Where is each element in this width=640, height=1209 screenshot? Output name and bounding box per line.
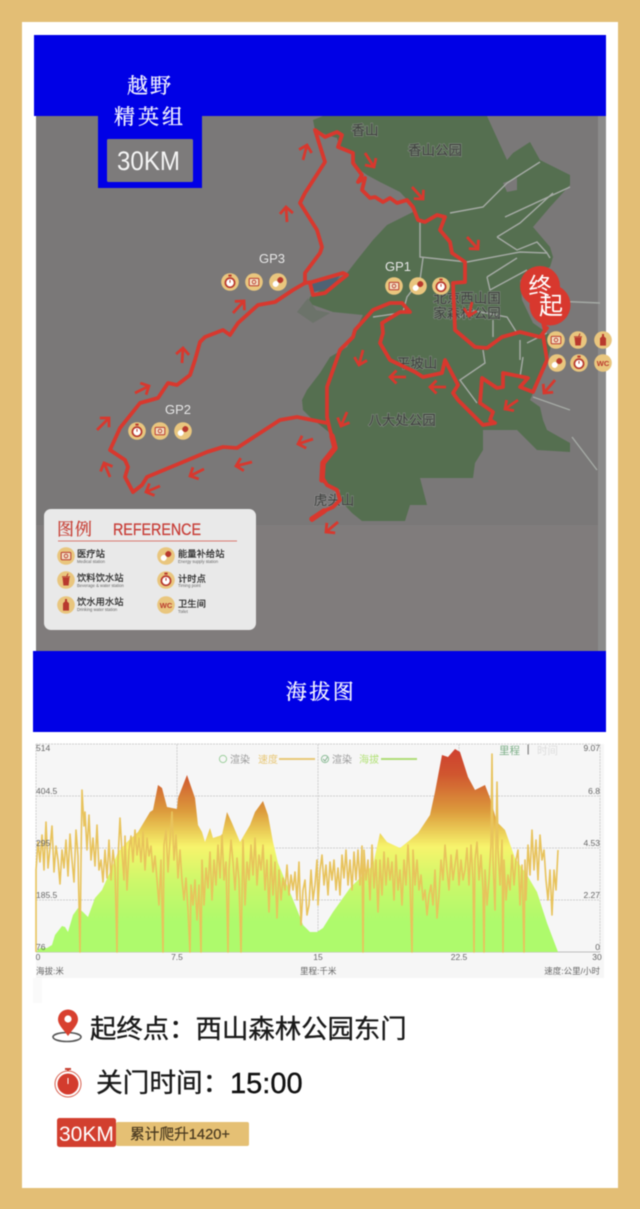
bottom axis: distance: 7.5 (171, 952, 183, 962)
map place labels: 平坡山 (397, 356, 437, 371)
distance and ascent tag: 累计爬升1420+ (130, 1126, 230, 1143)
elevation heading band (33, 651, 606, 732)
legend title: 图例 (57, 520, 93, 539)
title: group name (114, 74, 186, 129)
closing time row (55, 1068, 303, 1100)
panel: route map (36, 116, 612, 651)
legend item: toilet (157, 596, 206, 614)
start area service icons: WC (597, 359, 610, 368)
axis titles (36, 966, 600, 976)
chart legend: 海拔 (359, 753, 379, 766)
bottom axis: distance: 22.5 (451, 952, 468, 962)
closing time row: 关门时间： (96, 1068, 229, 1098)
checkpoint GP3 (221, 251, 287, 291)
legend item: toilet: Toilet (178, 609, 189, 614)
map place labels: 北京西山国 (433, 291, 501, 306)
left axis: elevation: 185.5 (36, 890, 58, 900)
legend item: beverage: 饮料饮水站 (77, 572, 124, 583)
map place labels: 家森林公园 (433, 305, 501, 321)
direction arrows (97, 145, 555, 532)
distance/time toggle: 里程 (499, 745, 520, 757)
start and finish markers (520, 266, 570, 331)
right axis: speed: 0 (595, 942, 600, 952)
legend item: toilet: 卫生间 (178, 598, 206, 609)
checkpoint GP1: GP1 (385, 259, 411, 274)
icon: stopwatch (55, 1068, 81, 1097)
legend item: drinking water: Drinking water station (77, 607, 118, 612)
icon: map pin (53, 1010, 81, 1042)
start and finish markers: 起 (539, 293, 563, 320)
speed line (36, 754, 558, 952)
legend item: energy: 能量补给站 (178, 548, 224, 559)
start area service icons (547, 331, 612, 372)
right axis: speed: 6.8 (588, 786, 600, 796)
axis titles: 里程:千米 (300, 966, 337, 976)
race route (110, 130, 547, 520)
distance/time toggle (499, 744, 558, 757)
chart legend: 渲染 (332, 753, 352, 766)
distance badge: 30KM (117, 146, 180, 176)
distance and ascent tag (57, 1118, 249, 1147)
legend item: drinking water: 饮水用水站 (77, 596, 124, 607)
bottom axis: distance: 15 (313, 952, 323, 962)
group title block (98, 74, 202, 188)
legend item: energy: Energy supply station (178, 559, 219, 564)
bottom axis: distance (36, 952, 602, 962)
map place labels: 虎头山 (314, 493, 354, 508)
start and finish markers: 终 (528, 273, 552, 299)
title: group name: 精英组 (114, 105, 186, 129)
legend item: timing: 计时点 (178, 573, 206, 584)
checkpoint GP3: GP3 (259, 251, 285, 266)
left axis: elevation: 76 (36, 942, 46, 952)
legend item: medical: 医疗站 (77, 548, 105, 559)
right axis: speed: 4.53 (583, 838, 600, 848)
legend item: timing: Timing point (178, 583, 201, 588)
checkpoint GP2: GP2 (165, 402, 191, 417)
right axis: speed: 9.07 (583, 743, 600, 753)
right axis: speed: 2.27 (583, 890, 600, 900)
trails (373, 162, 600, 470)
left axis: elevation: 514 (36, 743, 50, 753)
legend item: medical: Medical station (77, 559, 106, 564)
map place labels: 八大处公园 (368, 413, 436, 428)
legend panel (44, 509, 256, 630)
map place labels: 香山公园 (408, 143, 462, 158)
checkpoint GP1 (385, 259, 450, 295)
map place labels: 香山 (352, 123, 378, 138)
left axis: elevation: 404.5 (36, 786, 58, 796)
legend item: timing (157, 571, 206, 589)
elevation heading band: 海拔图 (286, 680, 356, 704)
axis titles: 速度:公里/小时 (544, 966, 600, 976)
axis titles: 海拔:米 (36, 966, 64, 976)
legend item: energy (157, 547, 224, 565)
map place labels (314, 123, 501, 508)
chart legend: 渲染 (230, 753, 250, 766)
title: group name: 越野 (127, 74, 173, 98)
distance and ascent tag: 30KM (59, 1123, 114, 1146)
legend item: beverage: Beverage & water station (77, 583, 124, 588)
closing time row: 15:00 (230, 1068, 303, 1100)
bottom axis: distance: 0 (36, 952, 41, 962)
right axis: speed (583, 743, 600, 952)
legend item: medical (57, 547, 106, 565)
chart grid (36, 744, 600, 952)
chart legend (219, 753, 417, 766)
legend item: toilet: WC (160, 601, 173, 610)
elevation chart (33, 743, 604, 1003)
legend item: drinking water (57, 596, 124, 614)
start and finish location row: 起终点：西山森林公园东门 (90, 1014, 407, 1044)
chart legend: 速度 (258, 753, 278, 766)
legend panel: REFERENCE (113, 520, 201, 539)
distance/time toggle: 时间 (537, 744, 558, 757)
legend item: beverage (57, 571, 124, 589)
checkpoint GP2 (128, 402, 192, 440)
forest park area (302, 116, 570, 521)
header band (34, 35, 606, 116)
map base (36, 116, 606, 651)
bottom axis: distance: 30 (592, 952, 602, 962)
left axis: elevation: 295 (36, 838, 50, 848)
elevation area (36, 749, 558, 952)
left axis: elevation (36, 743, 58, 952)
pond (312, 276, 340, 292)
